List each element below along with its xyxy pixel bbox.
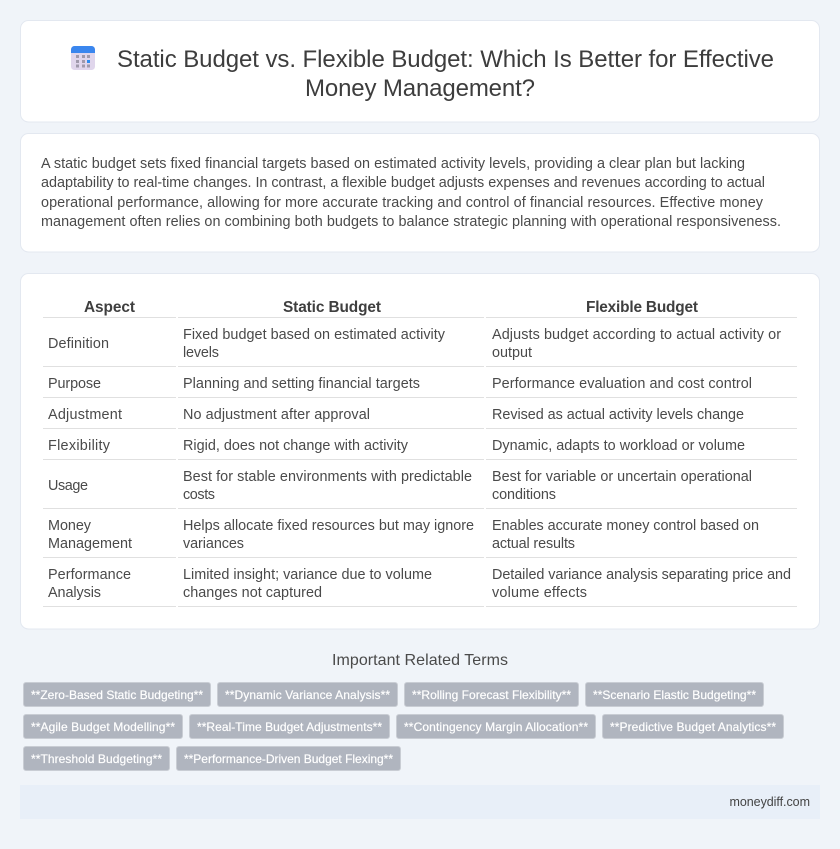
- row: definition: Definition: [48, 336, 109, 352]
- row: adjustment: Adjustment: [48, 407, 122, 423]
- row: performance analysis: volume effects: [492, 585, 587, 601]
- row: money management: actual results: [492, 536, 575, 552]
- row: definition: Adjusts budget according to actual activity or: [492, 327, 781, 343]
- text block: introduction: operational performance, allowing for more accurate tracking and control of financial resources. Effective money: [41, 195, 764, 211]
- row: money management: variances: [183, 536, 244, 552]
- row: money management: Money: [48, 518, 92, 534]
- row: performance analysis: Performance: [48, 567, 131, 583]
- tags: related terms: **Scenario Elastic Budgeting**: [593, 688, 756, 702]
- row: flexibility: Rigid, does not change with activity: [183, 438, 409, 454]
- table header row: Aspect: [84, 299, 135, 316]
- row: definition: levels: [183, 345, 219, 361]
- row: definition: output: [492, 345, 532, 361]
- row: money management: Management: [48, 536, 132, 552]
- row: usage: costs: [183, 487, 215, 503]
- text block: introduction: adaptability to real-time changes. In contrast, a flexible budget adjusts expenses and revenues according to actual: [41, 175, 765, 191]
- row: performance analysis: Limited insight; variance due to volume: [183, 567, 432, 583]
- row: purpose: Purpose: [48, 376, 101, 392]
- tags: related terms: **Contingency Margin Allocation**: [404, 720, 588, 734]
- text block: introduction: management often relies on combining both budgets to balance strategic planning with operational responsiveness.: [41, 214, 781, 230]
- title: Money Management?: [305, 75, 535, 102]
- tags: related terms: **Real-Time Budget Adjustments**: [197, 720, 382, 734]
- row: flexibility: Flexibility: [48, 438, 111, 454]
- table header row: Flexible Budget: [586, 299, 698, 316]
- row: usage: Usage: [48, 478, 88, 494]
- row: performance analysis: Detailed variance analysis separating price and: [492, 567, 791, 583]
- tags: related terms: **Predictive Budget Analytics**: [610, 720, 776, 734]
- row: purpose: Planning and setting financial targets: [183, 376, 420, 392]
- row: purpose: Performance evaluation and cost control: [492, 376, 752, 392]
- heading: related terms: Important Related Terms: [332, 652, 508, 669]
- row: money management: Helps allocate fixed resources but may ignore: [183, 518, 474, 534]
- tags: related terms: [24, 682, 784, 770]
- panel: comparison table: [20, 274, 820, 629]
- tags: related terms: **Zero-Based Static Budgeting**: [31, 688, 203, 702]
- panel: header: [20, 20, 820, 122]
- row: performance analysis: Analysis: [48, 585, 101, 601]
- row: adjustment: Revised as actual activity levels change: [492, 407, 744, 423]
- row: usage: conditions: [492, 487, 556, 503]
- icon: calendar: [71, 46, 95, 70]
- tags: related terms: **Dynamic Variance Analysis**: [225, 688, 390, 702]
- text block: introduction: A static budget sets fixed financial targets based on estimated activity levels, providing a clear plan but lacking: [41, 156, 745, 172]
- tags: related terms: **Performance-Driven Budget Flexing**: [184, 752, 393, 766]
- tags: related terms: **Threshold Budgeting**: [31, 752, 162, 766]
- panel: introduction: [20, 134, 820, 252]
- table header row: Static Budget: [283, 299, 381, 316]
- row: usage: Best for stable environments with predictable: [183, 469, 472, 485]
- tags: related terms: **Rolling Forecast Flexibility**: [412, 688, 571, 702]
- footer: [20, 785, 820, 819]
- row: usage: Best for variable or uncertain operational: [492, 469, 752, 485]
- row: definition: Fixed budget based on estimated activity: [183, 327, 446, 343]
- row: adjustment: No adjustment after approval: [183, 407, 370, 423]
- tags: related terms: **Agile Budget Modelling**: [31, 720, 175, 734]
- row: flexibility: Dynamic, adapts to workload or volume: [492, 438, 745, 454]
- row: performance analysis: changes not captured: [183, 585, 322, 601]
- title: Static Budget vs. Flexible Budget: Which Is Better for Effective: [117, 46, 774, 73]
- footer: site name: moneydiff.com: [730, 795, 810, 809]
- row: money management: Enables accurate money control based on: [492, 518, 759, 534]
